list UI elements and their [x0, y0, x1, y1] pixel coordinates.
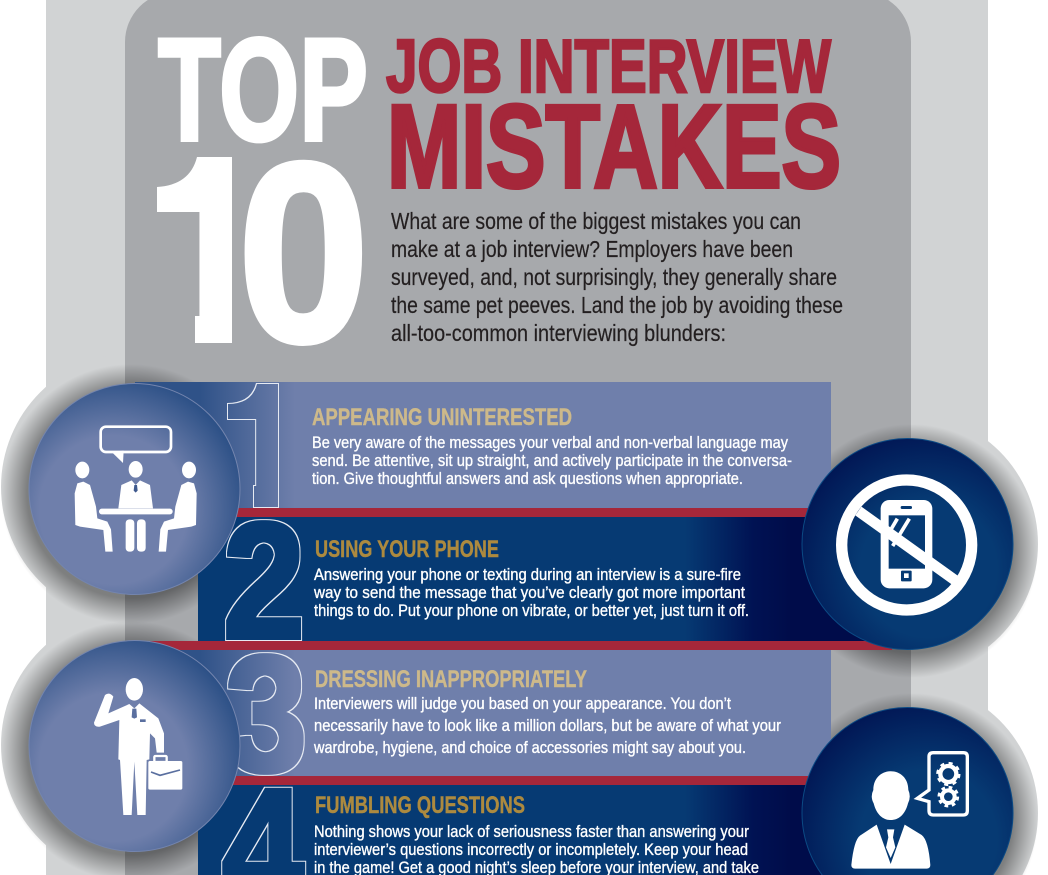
- body 3: wardrobe, hygiene, and choice of accessories might say about you.: [313, 739, 746, 757]
- band 3: [135, 650, 831, 776]
- red divider 2: [150, 641, 892, 650]
- icon circle: person thinking: [802, 708, 1013, 875]
- icon circle: business person: [29, 640, 240, 852]
- inner grey panel: [125, 0, 911, 875]
- icon: crossed-out phone: [842, 480, 972, 610]
- number 3: 3: [225, 622, 307, 807]
- heading 1: APPEARING UNINTERESTED: [312, 404, 572, 431]
- shadow: left circle 1: [1, 364, 261, 624]
- halo: right circle 4: [776, 682, 1038, 875]
- intro text: make at a job interview? Employers have been: [391, 236, 793, 262]
- body 2: [313, 566, 749, 620]
- title: job interview mistakes: MISTAKES: [387, 81, 841, 213]
- body 1: Be very aware of the messages your verbal and non-verbal language may: [312, 434, 789, 452]
- icon circle: no phone: [802, 438, 1013, 650]
- intro text: all-too-common interviewing blunders:: [391, 320, 726, 346]
- shadow: left circle 3: [1, 621, 261, 875]
- title: TOP 10: 0: [238, 110, 370, 396]
- halo: left circle 1: [1, 353, 269, 621]
- body 1: [312, 434, 792, 488]
- band 2: [198, 517, 890, 641]
- red divider 3: [198, 776, 831, 785]
- shadow: right circle 4: [784, 693, 1038, 875]
- icon circle: meeting: [29, 384, 240, 594]
- body 3: necessarily have to look like a million dollars, but be aware of what your: [314, 717, 781, 735]
- heading 2: USING YOUR PHONE: [315, 536, 499, 563]
- panel: mistake 2: [198, 489, 890, 674]
- body 1: tion. Give thoughtful answers and ask questions when appropriate.: [312, 470, 743, 488]
- heading 4: FUMBLING QUESTIONS: [315, 792, 525, 819]
- icon: man with gears speech bubble: [851, 753, 967, 869]
- body 3: Interviewers will judge you based on your appearance. You don’t: [314, 695, 731, 713]
- body 2: things to do. Put your phone on vibrate, or better yet, just turn it off.: [314, 602, 749, 620]
- intro text: surveyed, and, not surprisingly, they generally share: [391, 264, 837, 290]
- shadow: right circle 2: [784, 424, 1038, 678]
- body 1: send. Be attentive, sit up straight, and actively participate in the conversa-: [312, 452, 792, 470]
- panel: mistake 3: [135, 622, 831, 807]
- intro text: [391, 208, 843, 346]
- number 1: [227, 383, 279, 508]
- body 2: Answering your phone or texting during an interview is a sure-fire: [314, 566, 741, 584]
- title: TOP 10: 1: [138, 104, 285, 400]
- icon: people at a table with speech bubble: [75, 427, 197, 552]
- panel: mistake 4: [198, 755, 890, 875]
- icon: man with briefcase: [94, 678, 182, 815]
- body 4: [314, 823, 759, 875]
- body 2: way to send the message that you’ve clearly got more important: [313, 584, 745, 602]
- band 1: [135, 382, 831, 508]
- body 4: interviewer’s questions incorrectly or incompletely. Keep your head: [314, 841, 748, 859]
- halo: left circle 3: [1, 611, 269, 875]
- number 1: 1: [225, 356, 305, 541]
- title: TOP 10: [157, 36, 366, 346]
- number 2: 2: [223, 489, 305, 674]
- panel: mistake 1: [135, 382, 831, 508]
- intro text: the same pet peeves. Land the job by avoiding these: [391, 292, 843, 318]
- red divider 1: [198, 508, 831, 517]
- body 3: [313, 695, 781, 757]
- title: job interview mistakes: JOB INTERVIEW: [386, 24, 831, 108]
- title: TOP 10: TOP: [158, 8, 368, 171]
- halo: right circle 2: [776, 413, 1038, 675]
- heading 3: DRESSING INAPPROPRIATELY: [315, 666, 587, 693]
- title: job interview mistakes: [386, 24, 841, 213]
- body 4: Nothing shows your lack of seriousness faster than answering your: [314, 823, 749, 841]
- band 4: [198, 785, 890, 875]
- intro text: What are some of the biggest mistakes you can: [391, 208, 801, 234]
